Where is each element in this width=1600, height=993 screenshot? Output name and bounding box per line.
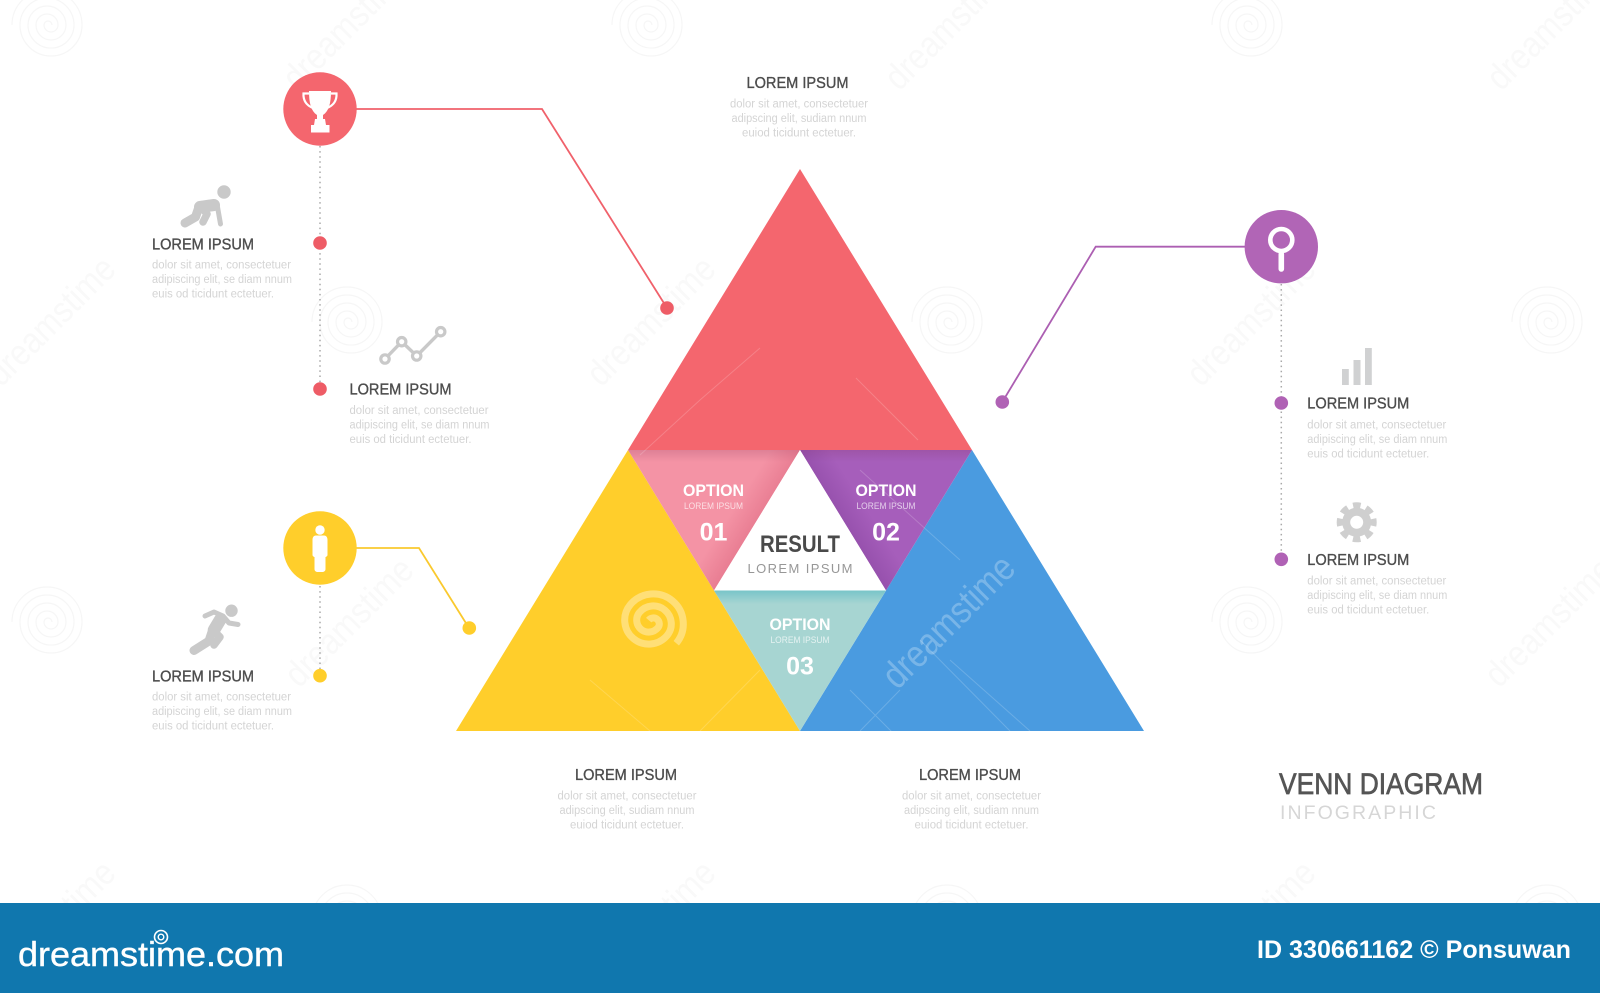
footer bar (0, 903, 1600, 993)
triangle: purple overlap 02 (800, 450, 972, 590)
top text block: dolor sit amet, consectetuer (730, 98, 868, 110)
icon: kneeling runner (185, 185, 231, 224)
bottom text block: left (558, 767, 697, 832)
purple circle (1245, 210, 1318, 283)
bottom text block: right: euiod ticidunt ectetuer. (914, 820, 1028, 832)
title (1279, 768, 1483, 824)
watermark pattern: dreamstime (1178, 248, 1323, 393)
icon: line chart (381, 328, 445, 363)
red dotted timeline (319, 146, 321, 389)
icon: trophy (303, 91, 337, 132)
yellow connector dot (462, 621, 476, 635)
purple timeline dots (1274, 396, 1288, 566)
text block: red item 1: euis od ticidunt ectetuer. (152, 288, 274, 300)
bottom text block: right (902, 767, 1041, 832)
text block: purple item 2: adipiscing elit, se diam nnum (1307, 590, 1447, 602)
text block: red item 2: LOREM IPSUM (350, 382, 452, 398)
yellow callout (283, 511, 476, 682)
watermark on triangles: dreamstime (874, 547, 1024, 697)
triangle: red top (628, 169, 972, 450)
red timeline dots (313, 236, 327, 396)
text block: red item 2: dolor sit amet, consectetuer (350, 405, 489, 417)
text block: red item 1: dolor sit amet, consectetuer (152, 260, 291, 272)
text block: red item 1: adipiscing elit, se diam nnum (152, 274, 292, 286)
text block: red item 2: euis od ticidunt ectetuer. (350, 434, 472, 446)
top text block: euiod ticidunt ectetuer. (742, 128, 856, 140)
watermark on triangles (590, 348, 1030, 745)
top text block: LOREM IPSUM (746, 75, 848, 92)
text block: purple item 2: LOREM IPSUM (1307, 552, 1409, 569)
bottom text block: right: LOREM IPSUM (919, 767, 1021, 784)
yellow timeline dot (313, 669, 327, 682)
option 01 text (683, 481, 744, 546)
title: VENN DIAGRAM (1279, 768, 1483, 801)
footer credit: ID 330661162 © Ponsuwan (1257, 936, 1571, 964)
option 03 text: 03 (786, 652, 814, 680)
purple connector dot (996, 395, 1009, 409)
yellow circle (283, 511, 357, 585)
option 02 text (856, 481, 916, 546)
result text: LOREM IPSUM (748, 561, 852, 576)
text block: red item 2 (350, 328, 490, 446)
text block: purple item 2: dolor sit amet, consectetuer (1307, 576, 1446, 588)
text block: yellow item: LOREM IPSUM (152, 668, 254, 686)
option 02 text: 02 (872, 518, 900, 546)
watermark pattern: dreamstime (578, 852, 723, 993)
bottom text block: right: dolor sit amet, consectetuer (902, 790, 1041, 802)
top text block: adipscing elit, sudiam nnum (732, 113, 866, 125)
red connector dot (660, 301, 674, 315)
purple dotted timeline (1280, 284, 1282, 559)
icon: gear (1340, 506, 1373, 539)
text block: yellow item (152, 604, 292, 732)
option 03 text: LOREM IPSUM (770, 635, 830, 646)
top text block (730, 75, 868, 140)
text block: purple item 2: euis od ticidunt ectetuer. (1307, 604, 1429, 616)
red callout (283, 72, 674, 396)
triangle: teal overlap 03 (714, 590, 886, 731)
option 02 text: OPTION (856, 481, 916, 500)
footer logo: dreamstime.com (18, 936, 284, 974)
text block: yellow item: adipiscing elit, se diam nnum (152, 706, 292, 718)
option 03 text: OPTION (770, 615, 830, 634)
icon: person (312, 525, 328, 572)
option 01 text: LOREM IPSUM (684, 501, 743, 512)
text block: yellow item: dolor sit amet, consectetuer (152, 692, 291, 704)
text block: purple item 1: adipiscing elit, se diam nnum (1307, 434, 1447, 446)
text block: purple item 1: euis od ticidunt ectetuer. (1307, 448, 1429, 460)
bottom text block: left: LOREM IPSUM (575, 767, 677, 784)
text block: purple item 2 (1307, 506, 1447, 616)
red circle (283, 72, 357, 146)
text block: red item 1 (152, 185, 292, 300)
triangle: white result (714, 450, 886, 590)
option 02 text: LOREM IPSUM (856, 501, 916, 512)
option 01 text: OPTION (683, 481, 744, 500)
red connector line (350, 109, 667, 308)
yellow connector line (350, 548, 469, 628)
option 03 text (770, 615, 830, 680)
text block: purple item 1: LOREM IPSUM (1307, 396, 1409, 412)
text block: red item 2: adipiscing elit, se diam nnum (350, 420, 490, 432)
text block: yellow item: euis od ticidunt ectetuer. (152, 720, 274, 732)
watermark pattern: dreamstime (276, 549, 421, 694)
triangle: blue right (800, 450, 1144, 731)
watermark pattern: dreamstime (578, 248, 723, 393)
icon: magnifier (1270, 229, 1292, 269)
title: INFOGRAPHIC (1280, 802, 1436, 824)
triangle: yellow left (456, 450, 800, 731)
watermark pattern: dreamstime (1178, 852, 1323, 993)
bottom text block: left: adipscing elit, sudiam nnum (560, 805, 694, 817)
bottom text block: left: dolor sit amet, consectetuer (558, 790, 697, 802)
triangle: pink overlap 01 (628, 450, 800, 590)
purple connector line (1002, 247, 1250, 402)
result text (748, 531, 852, 576)
option 01 text: 01 (700, 518, 727, 546)
icon: bar chart (1342, 348, 1372, 385)
text block: purple item 1: dolor sit amet, consectetuer (1307, 420, 1446, 432)
icon: sprinter (194, 604, 238, 650)
venn triangle diagram (456, 169, 1144, 745)
purple callout (996, 210, 1318, 566)
yellow dotted timeline (319, 586, 321, 672)
result text: RESULT (760, 531, 840, 558)
text block: red item 1: LOREM IPSUM (152, 236, 254, 254)
bottom text block: right: adipscing elit, sudiam nnum (904, 805, 1039, 817)
bottom text block: left: euiod ticidunt ectetuer. (570, 820, 684, 832)
text block: purple item 1 (1307, 348, 1447, 460)
